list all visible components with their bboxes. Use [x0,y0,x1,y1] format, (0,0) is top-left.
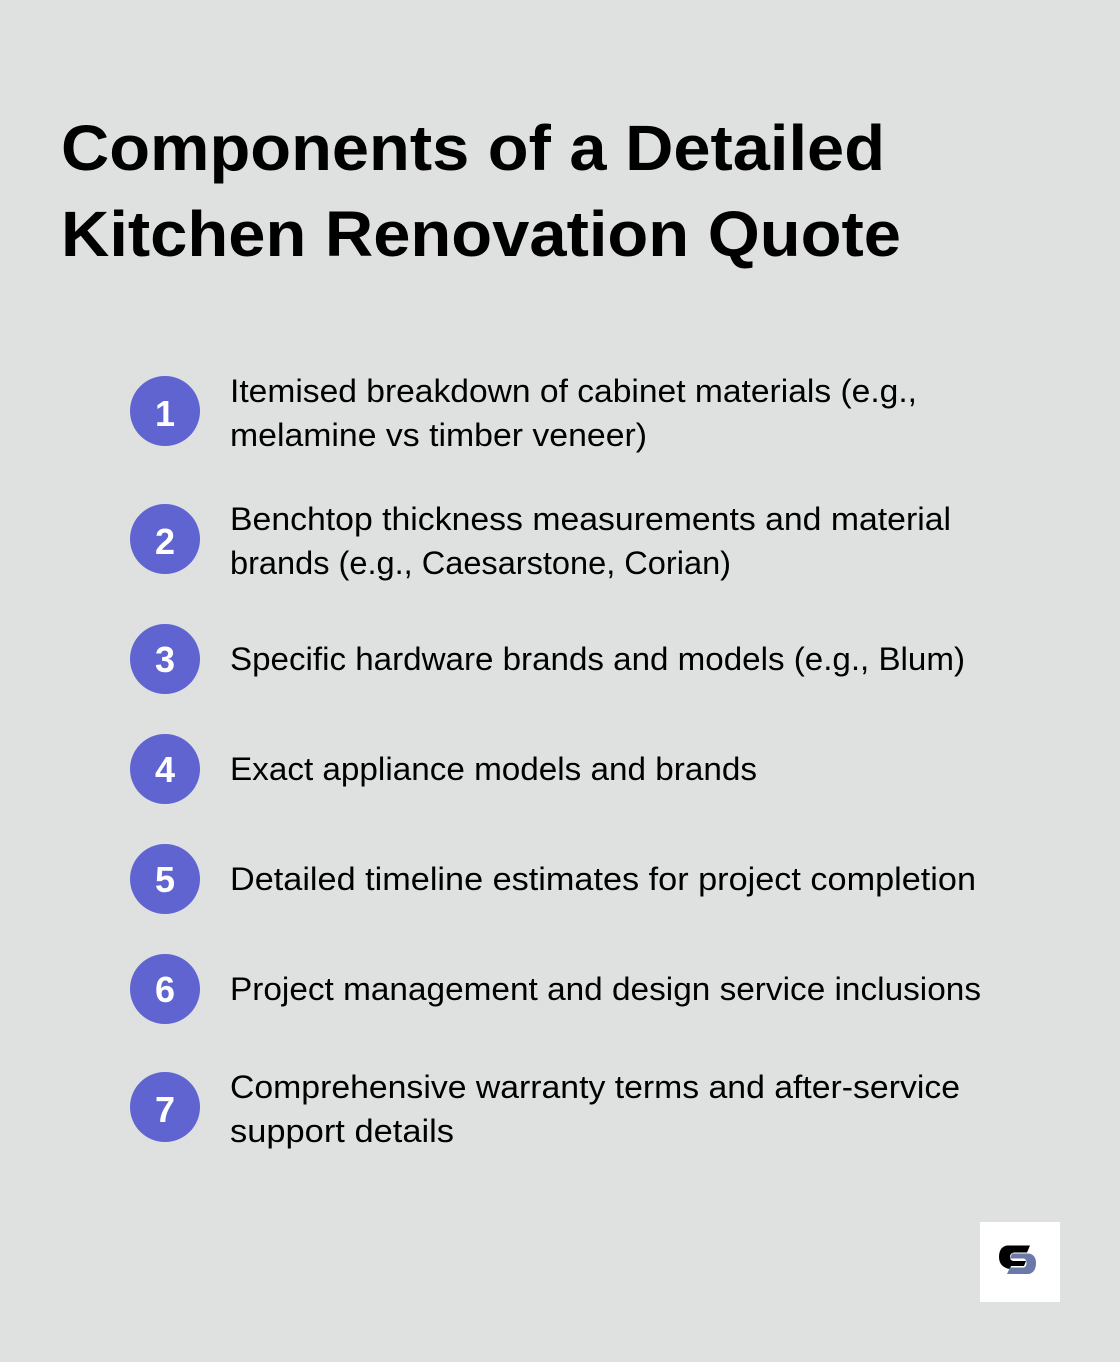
number badge 6: 6 [155,969,175,1010]
number badge 1: 1 [155,393,175,434]
number badge 4: 4 [155,749,175,790]
title: Components of a Detailed [61,112,885,184]
item 4 [130,734,757,804]
item 7 text [230,1069,960,1149]
item 2 text [230,501,951,581]
title: Kitchen Renovation Quote [61,198,901,270]
item 3 text: Specific hardware brands and models (e.g., Blum) [230,641,965,677]
item 7 [130,1069,960,1149]
number badge 1 [130,376,200,446]
item 7 text: support details [230,1113,454,1149]
item 5 [130,844,976,914]
number badge 7 [130,1072,200,1142]
number badge 3 [130,624,200,694]
number badge 5 [130,844,200,914]
item 1 text [230,373,917,453]
number badge 7: 7 [155,1089,175,1130]
item 6 [130,954,981,1024]
number badge 2 [130,504,200,574]
number badge 3: 3 [155,639,175,680]
item 2 text: brands (e.g., Caesarstone, Corian) [230,545,731,581]
item 2 text: Benchtop thickness measurements and material [230,501,951,537]
title [61,112,901,270]
item 6 text: Project management and design service inclusions [230,971,981,1007]
item 1 text: melamine vs timber veneer) [230,417,647,453]
item 1 [130,373,917,453]
number badge 5: 5 [155,859,175,900]
logo badge [980,1222,1060,1302]
list of quote components [130,373,981,1149]
item 5 text: Detailed timeline estimates for project completion [230,861,976,897]
number badge 4 [130,734,200,804]
item 3 [130,624,965,694]
number badge 2: 2 [155,521,175,562]
item 1 text: Itemised breakdown of cabinet materials (e.g., [230,373,917,409]
item 4 text: Exact appliance models and brands [230,751,757,787]
item 7 text: Comprehensive warranty terms and after-service [230,1069,960,1105]
item 2 [130,501,951,581]
number badge 6 [130,954,200,1024]
